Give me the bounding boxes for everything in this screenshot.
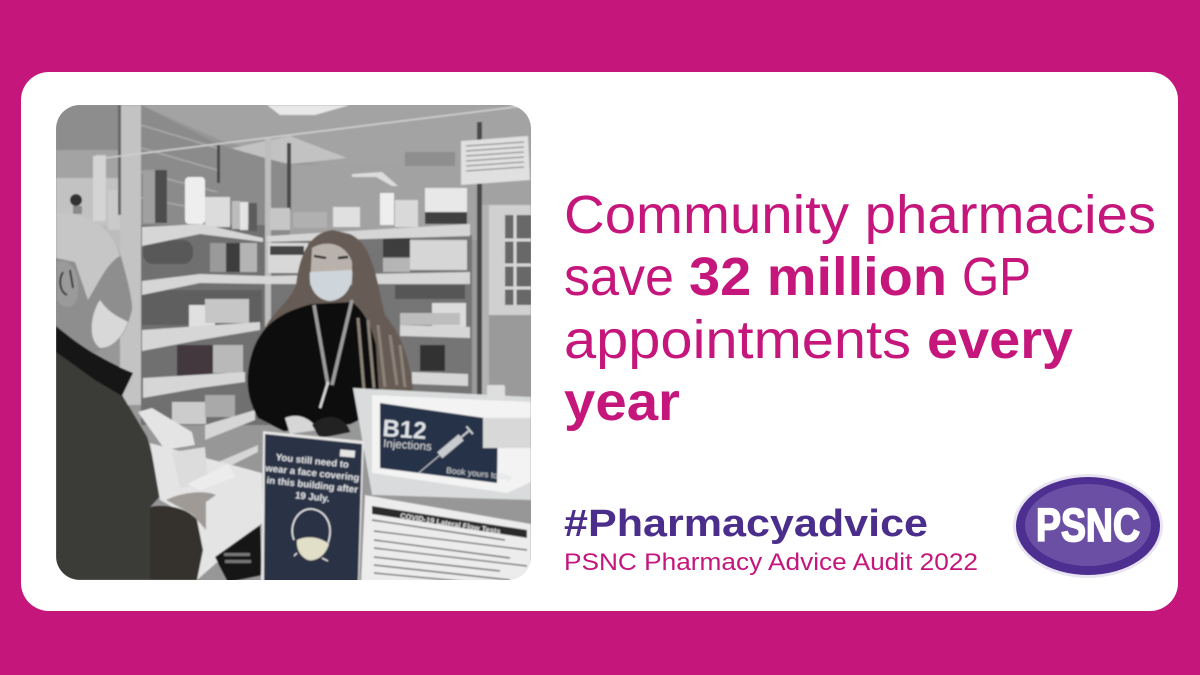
NHS face covering sign: You still need to: [275, 452, 349, 471]
customer sleeve: [150, 506, 203, 580]
source line: PSNC Pharmacy Advice Audit 2022: [564, 549, 978, 576]
headline: 32 million: [689, 247, 947, 307]
NHS face covering sign: [261, 431, 364, 582]
NHS face covering sign: 19 July.: [295, 490, 330, 505]
lateral flow test poster: [361, 495, 531, 582]
hashtag: #Pharmacyadvice: [564, 503, 928, 545]
counter: [150, 443, 262, 582]
lateral flow test poster: COVID-19 Lateral Flow Tests: [400, 511, 501, 536]
PSNC logo: [1013, 474, 1163, 578]
infographic canvas: [21, 72, 1178, 611]
headline: appointments: [564, 310, 911, 370]
headline: every: [927, 310, 1073, 370]
white panel: [21, 72, 1178, 611]
headline: [564, 185, 1156, 432]
headline: year: [564, 372, 680, 432]
glass screen edge: [93, 105, 531, 221]
headline: GP: [962, 247, 1031, 307]
shelves: [142, 224, 470, 470]
photo: pharmacist and customer at counter: [56, 105, 531, 582]
goods and hand: [138, 407, 216, 530]
B12 display: B12: [382, 415, 427, 445]
shelving back: [118, 105, 489, 425]
NHS face covering sign: wear a face covering: [264, 463, 360, 484]
ceiling and walls: [56, 105, 531, 393]
NHS face covering sign: in this building after: [266, 475, 359, 496]
PSNC logo: PSNC: [1036, 499, 1140, 551]
B12 display: [353, 385, 531, 500]
customer: [56, 226, 160, 580]
shelf stock: [143, 170, 467, 424]
headline: save: [564, 247, 674, 307]
B12 display: Book yours today: [446, 465, 513, 482]
notice on wall: [461, 136, 530, 185]
B12 display: Injections: [383, 438, 432, 453]
headline: Community pharmacies: [564, 185, 1156, 245]
pharmacist: [248, 230, 413, 438]
